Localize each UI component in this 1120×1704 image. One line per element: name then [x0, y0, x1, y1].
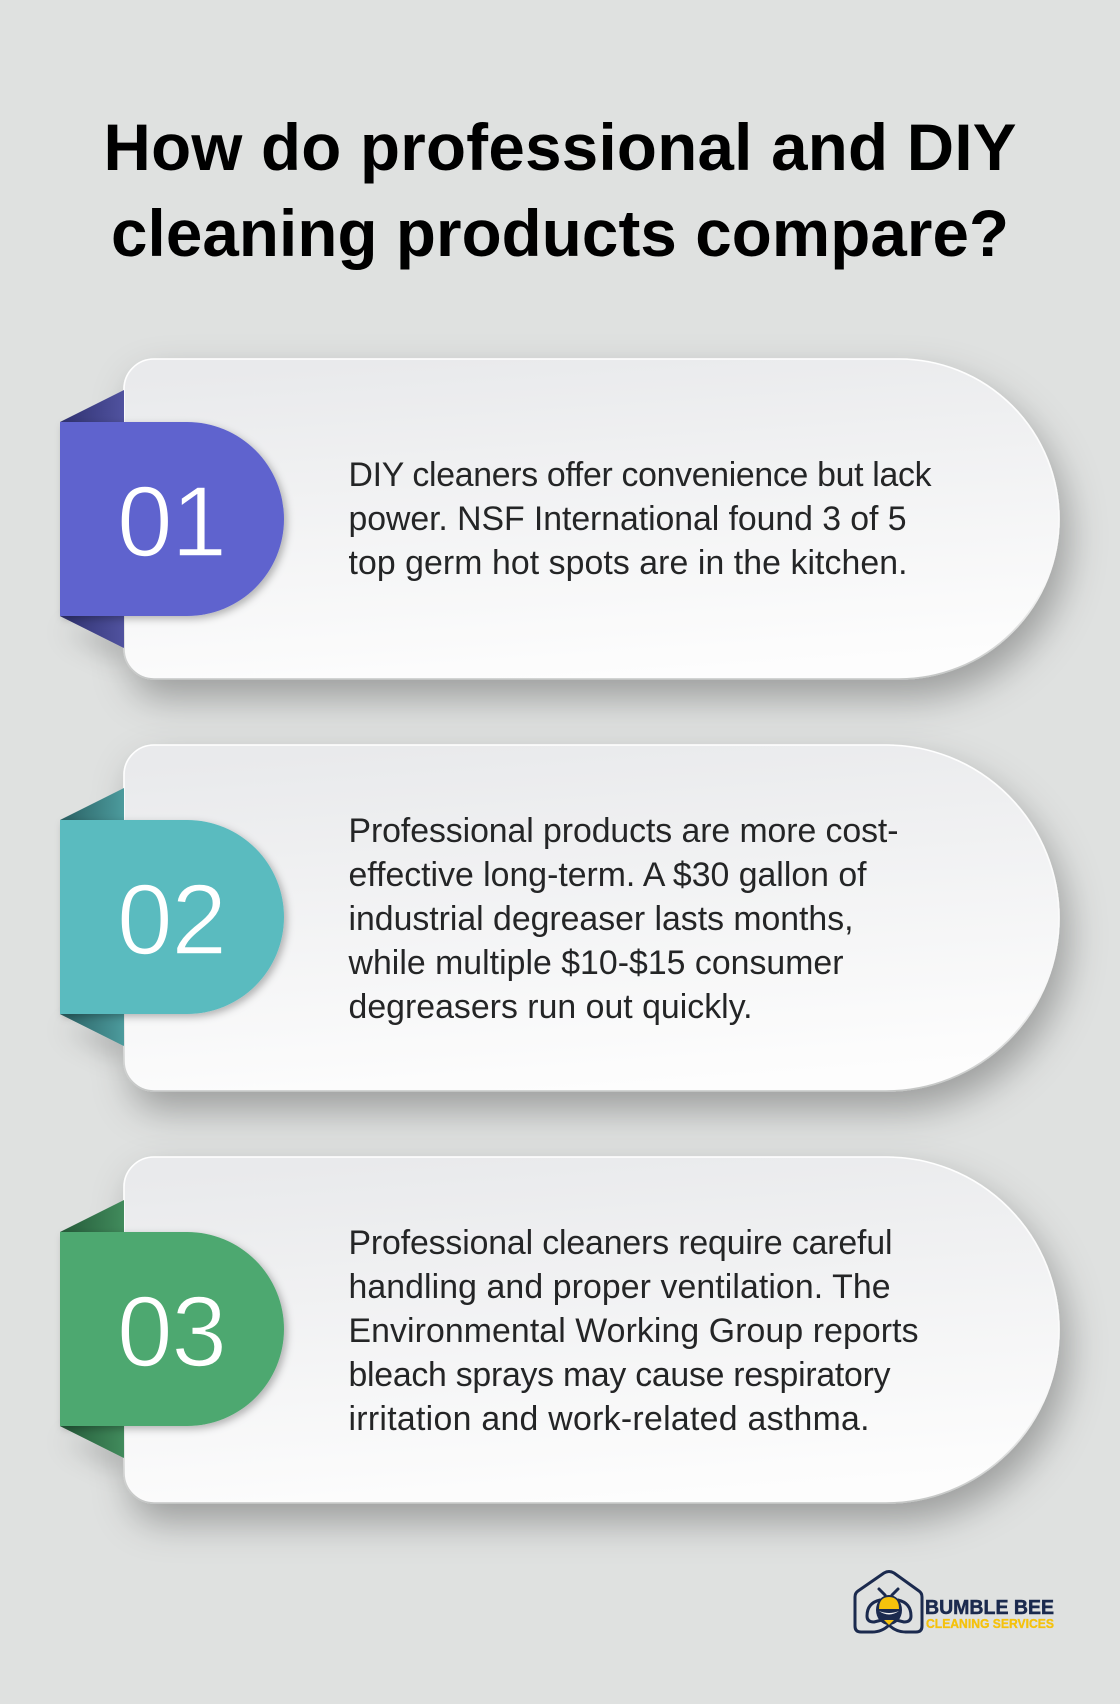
number badge 01: 01 — [117, 466, 227, 578]
fold shadow ribbon 02 — [60, 1014, 124, 1046]
card 03 — [124, 1157, 1059, 1503]
bottom ribbon fold 03 — [60, 1426, 124, 1458]
text 03 — [348, 1224, 918, 1438]
number badge 02 — [60, 820, 284, 1014]
logo: Bumble Bee Cleaning Services — [855, 1572, 1054, 1632]
text 02: while multiple $10-$15 consumer — [348, 944, 844, 982]
text 02: effective long-term. A $30 gallon of — [348, 856, 867, 894]
text 03: handling and proper ventilation. The — [348, 1268, 890, 1306]
logo tagline: CLEANING SERVICES — [926, 1616, 1054, 1631]
icon: house with bee — [855, 1572, 922, 1632]
number badge 03 — [60, 1232, 284, 1426]
text 02: degreasers run out quickly. — [348, 988, 752, 1026]
text 01: DIY cleaners offer convenience but lack — [348, 456, 932, 494]
card 01 — [124, 359, 1059, 679]
number badge 02: 02 — [117, 864, 227, 976]
top ribbon fold 02 — [60, 788, 124, 820]
text 02 — [348, 812, 898, 1026]
title: cleaning products compare? — [111, 197, 1009, 270]
title: How do professional and DIY — [104, 111, 1016, 184]
text 02: industrial degreaser lasts months, — [348, 900, 854, 938]
text 03: bleach sprays may cause respiratory — [348, 1356, 891, 1394]
card 02 — [124, 745, 1059, 1091]
fold shadow ribbon 03 — [60, 1426, 124, 1458]
text 03: Professional cleaners require careful — [348, 1224, 892, 1262]
text 01: power. NSF International found 3 of 5 — [348, 500, 906, 538]
top ribbon fold 01 — [60, 390, 124, 422]
text 01: top germ hot spots are in the kitchen. — [348, 544, 908, 582]
panel: step 01 — [60, 359, 1059, 679]
panel: step 03 — [60, 1157, 1059, 1503]
fold shadow ribbon 01 — [60, 616, 124, 648]
title — [104, 111, 1016, 270]
bottom ribbon fold 01 — [60, 616, 124, 648]
text 03: irritation and work-related asthma. — [348, 1400, 870, 1438]
text 03: Environmental Working Group reports — [348, 1312, 918, 1350]
number badge 03: 03 — [117, 1276, 227, 1388]
text 01 — [348, 456, 932, 582]
text 02: Professional products are more cost- — [348, 812, 898, 850]
icon: bee body — [876, 1595, 902, 1625]
panel: step 02 — [60, 745, 1059, 1091]
number badge 01 — [60, 422, 284, 616]
bottom ribbon fold 02 — [60, 1014, 124, 1046]
logo name: BUMBLE BEE — [925, 1597, 1054, 1619]
top ribbon fold 03 — [60, 1200, 124, 1232]
